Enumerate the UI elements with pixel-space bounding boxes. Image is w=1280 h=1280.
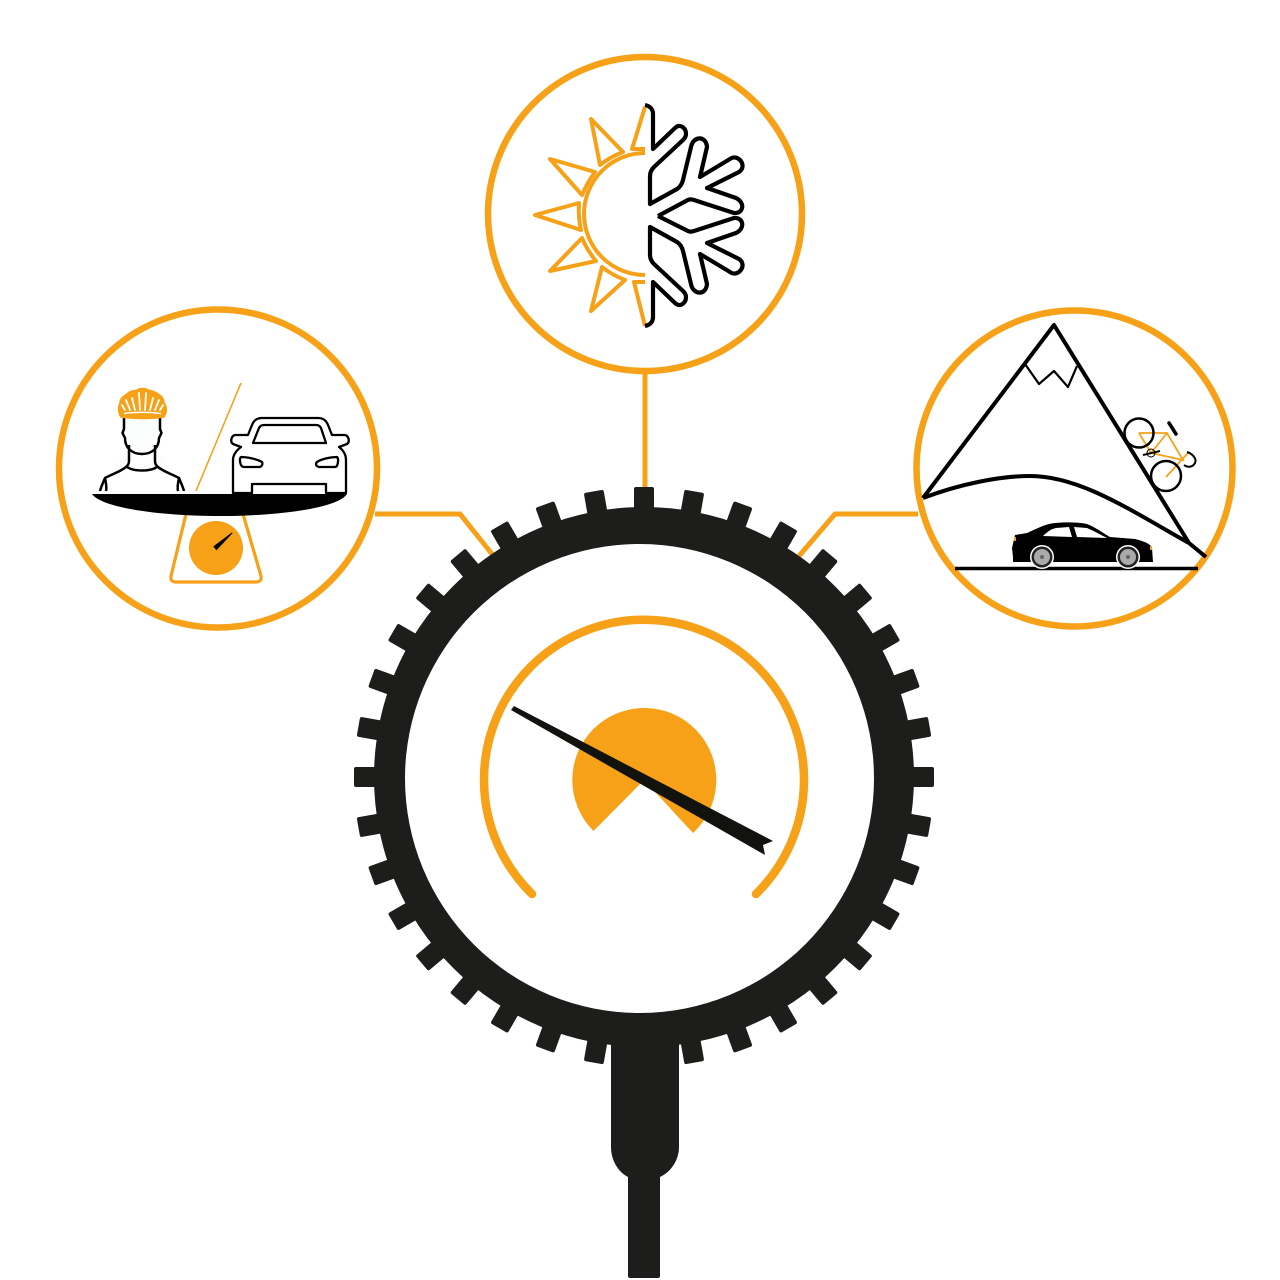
icon: mountain [923, 325, 1206, 557]
panel: weather [488, 57, 802, 371]
gauge needle [511, 706, 773, 855]
slash divider [196, 383, 241, 491]
connector: top circle to gauge [642, 372, 648, 490]
panel: rider and vehicle weight [59, 310, 377, 628]
scale needle [214, 533, 232, 550]
icon: bicycle on slope [1124, 418, 1196, 491]
panel: terrain [916, 310, 1232, 626]
gauge scale arc [484, 620, 804, 894]
scale plate [92, 494, 347, 516]
road line [955, 567, 1198, 570]
bicycle frame [1139, 433, 1188, 477]
panel ring [916, 310, 1232, 626]
icon: cyclist [100, 388, 184, 491]
scale base [171, 514, 261, 582]
bicycle wheels, saddle and bars [1124, 418, 1196, 491]
cyclist helmet [119, 388, 166, 418]
gauge ring [374, 507, 914, 1047]
gauge teeth [354, 487, 934, 1064]
gauge stem [611, 1035, 679, 1278]
icon: side-view car [1012, 522, 1153, 569]
connector: right circle to gauge [799, 514, 918, 556]
gauge dial face [405, 544, 874, 1013]
connector: left circle to gauge [375, 514, 492, 554]
cyclist head and shoulders [100, 416, 184, 491]
icon: half sun [535, 107, 645, 326]
icon: car front [231, 418, 349, 493]
scale dial [189, 521, 243, 575]
gauge: pressure gauge body [354, 487, 934, 1278]
gauge centre: orange sector [572, 708, 716, 833]
panel ring [488, 57, 802, 371]
panel ring [59, 310, 377, 628]
icon: half snowflake [645, 105, 743, 326]
